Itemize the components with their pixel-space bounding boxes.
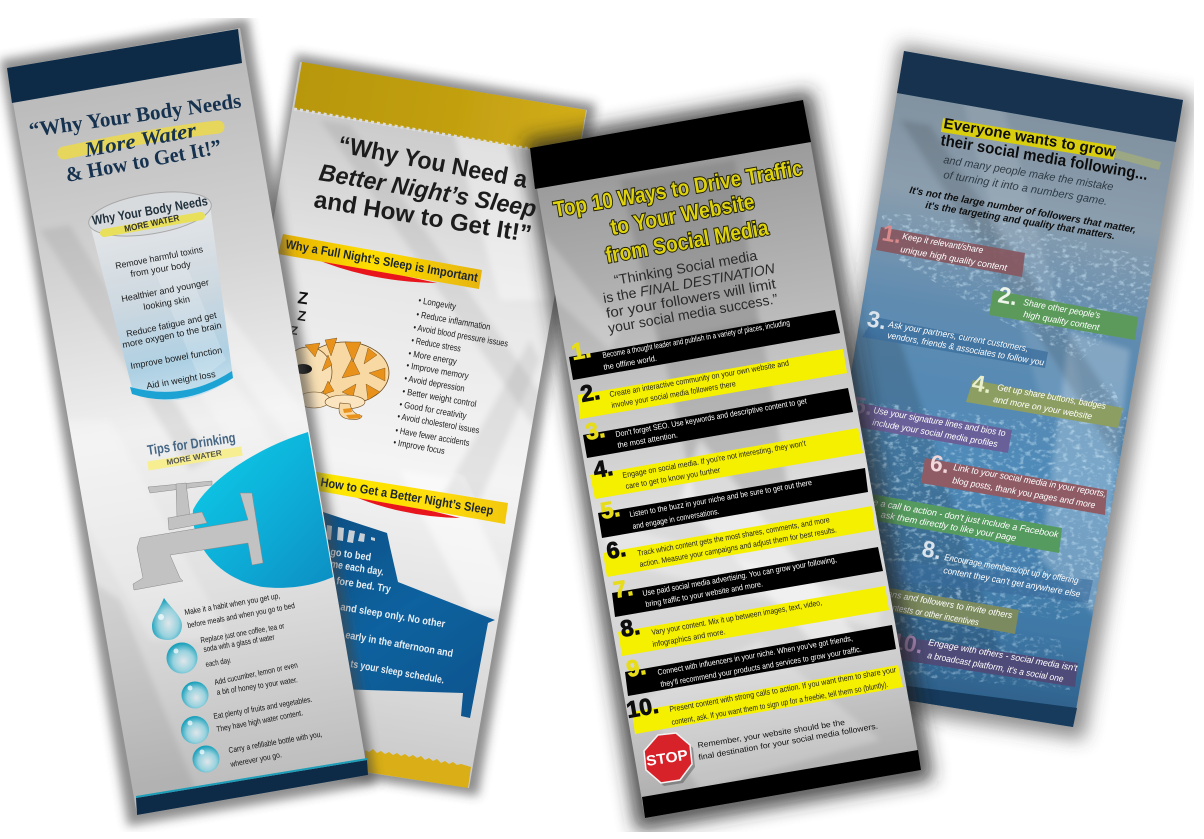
- step 6: action. Measure your campaigns and adjust them for best results.: [639, 525, 837, 569]
- panel: better night's sleep: [268, 48, 602, 802]
- step 2: 2.: [578, 378, 602, 407]
- tip 6: [921, 449, 1107, 515]
- tip 8: 8.: [920, 535, 944, 564]
- step 8: infographics and more.: [652, 627, 726, 649]
- icon: glass of water with benefits: from your body: [130, 259, 192, 279]
- icon: faucet: [133, 481, 263, 590]
- step 4: Engage on social media. If you're not interesting, they won't: [622, 439, 807, 480]
- step 7: bring traffic to your website and more.: [645, 579, 764, 609]
- section heading: how to sleep better: How to Get a Better Night’s Sleep: [320, 475, 495, 518]
- top band: [7, 29, 242, 103]
- tip 8: [885, 535, 1093, 603]
- step 6: 6.: [604, 535, 628, 564]
- tip 6: blog posts, thank you pages and more: [952, 475, 1096, 510]
- drinking tips text: Make it a habit when you get up,: [184, 591, 281, 617]
- title: [312, 131, 538, 248]
- drinking tips text: each day.: [205, 656, 232, 669]
- step 10: 10.: [624, 692, 660, 723]
- tip 4: [966, 369, 1123, 428]
- bottom band: [800, 672, 1077, 727]
- tip 7: Use a call to action - don't just include a Facebook: [862, 495, 1060, 540]
- panel: grow your social media following: [800, 44, 1194, 740]
- step 2: Create an interactive community on your own website and: [609, 359, 790, 399]
- step 10: content, ask. If you want them to sign up for a freebie, tell them so (bluntly).: [671, 680, 889, 727]
- title: [552, 155, 804, 268]
- heading: tips for drinking: MORE WATER: [166, 448, 223, 467]
- icon: sleeping cat: [284, 288, 389, 420]
- icon: stop sign: [644, 733, 695, 786]
- step 3: the most attention.: [617, 431, 678, 450]
- step 8: Vary your content. Mix it up between images, text, video,: [651, 598, 823, 637]
- step 5: [598, 468, 868, 538]
- benefits list: • Reduce inflammation: [416, 309, 491, 332]
- quote: [602, 247, 779, 336]
- step 7: Use paid social media advertising. You can grow your following,: [642, 555, 837, 598]
- drinking tips text: before meals and when you go to bed: [187, 601, 296, 630]
- icon: blue bed with tips: go to bed: [330, 546, 372, 564]
- title: & How to Get It!”: [64, 135, 223, 187]
- step 6: [603, 506, 875, 577]
- benefits list: • Better weight control: [402, 386, 477, 409]
- step 1: Become a thought leader and publish in a variety of places, including: [602, 318, 790, 360]
- blue water splash: [193, 432, 333, 588]
- closing note: Remember, your website should be the: [697, 718, 846, 750]
- icon: stop sign: STOP: [645, 748, 689, 770]
- step 4: [590, 428, 863, 499]
- tip 1: unique high quality content: [900, 244, 1008, 273]
- tip 9: Ask fans and followers to invite others: [867, 585, 1014, 620]
- icon: sleeping cat: Z: [296, 288, 309, 308]
- tip 3: [862, 305, 1048, 368]
- tip 8: content they can't get anywhere else: [943, 565, 1081, 599]
- title: “Why You Need a: [336, 131, 530, 194]
- tip 4: Get up share buttons, badges: [997, 382, 1107, 411]
- icon: blue bed with tips: [300, 505, 495, 718]
- step 8: 8.: [618, 613, 642, 642]
- panel: top 10 ways to drive traffic: [524, 90, 934, 832]
- closing note: final destination for your social media followers.: [698, 722, 879, 762]
- step 9: 9.: [624, 653, 648, 682]
- tip 5: Use your signature lines and bios to: [873, 405, 1006, 438]
- step 9: they'll recommend your products and services to grow your traffic.: [660, 645, 862, 689]
- step 5: Listen to the buzz in your niche and be sure to get out there: [629, 478, 813, 519]
- top band: [530, 100, 811, 189]
- bottom yellow band: [365, 749, 471, 788]
- step 3: [583, 388, 853, 458]
- quote: is the FINAL DESTINATION: [602, 260, 777, 306]
- step 3: Don't forget SEO. Use keywords and descriptive content to get: [615, 396, 808, 439]
- icon: glass of water with benefits: Healthier and younger: [120, 277, 210, 304]
- step 10: Present content with strong calls to action. If you want them to share your: [669, 665, 897, 714]
- tip 5: 5.: [851, 391, 875, 420]
- step 7: 7.: [611, 574, 635, 603]
- benefits list: • Improve memory: [406, 360, 470, 381]
- tip 2: 2.: [996, 281, 1020, 310]
- tip 10: [888, 627, 1079, 687]
- tip 7: link, ask them directly to like your page: [862, 506, 1017, 543]
- top yellow band: [294, 62, 586, 157]
- icon: blue bed with tips: fore bed. Try: [336, 575, 392, 596]
- tip 1: Keep it relevant/share: [902, 231, 984, 255]
- step 5: and engage in conversations.: [632, 507, 720, 531]
- step 1: [569, 310, 840, 380]
- title: from Social Media: [604, 215, 771, 268]
- tip 6: 6.: [928, 449, 952, 478]
- title: Top 10 Ways to Drive Traffic: [552, 155, 804, 222]
- drinking tips text: [184, 591, 323, 769]
- icon: glass of water with benefits: Remove harmful toxins: [114, 244, 204, 271]
- heading: it's the targeting and quality that matters.: [925, 200, 1116, 242]
- drinking tips text: Carry a refillable bottle with you,: [228, 730, 323, 755]
- tip 9: with contests or other incentives: [868, 598, 980, 627]
- step 1: the offline world.: [603, 354, 658, 372]
- step 9: Connect with influencers in your niche. When you've got friends,: [657, 634, 853, 677]
- icon: glass of water with benefits: looking skin: [143, 294, 191, 312]
- heading: of turning it into a numbers game.: [943, 169, 1108, 208]
- heading: and many people make the mistake: [943, 154, 1114, 193]
- drinking tips text: Add cucumber, lemon or even: [214, 660, 299, 687]
- step 3: 3.: [583, 416, 607, 445]
- tip 10: Engage with others - social media isn't: [928, 637, 1079, 673]
- quote: “Thinking Social media: [613, 247, 759, 288]
- heading: tips for drinking: Tips for Drinking: [146, 429, 236, 458]
- drinking tips text: soda with a glass of water: [203, 633, 276, 654]
- tip 4: and more on your website: [993, 394, 1093, 421]
- title: and How to Get It!”: [312, 186, 534, 248]
- drinking tips text: Eat plenty of fruits and vegetables.: [213, 695, 313, 721]
- icon: sleeping cat: Z: [290, 323, 299, 338]
- benefits list: • Reduce stress: [411, 335, 462, 354]
- bottom band: [642, 750, 921, 818]
- section heading: why sleep matters: Why a Full Night’s Sleep is Important: [284, 237, 480, 285]
- benefits list: • Good for creativity: [399, 399, 468, 421]
- tip 3: 3.: [865, 305, 889, 334]
- title: to Your Website: [608, 189, 756, 240]
- bottom band: [136, 758, 368, 815]
- step 9: [624, 625, 896, 696]
- title: More Water: [81, 118, 199, 162]
- icon: blue bed with tips: early in the afternoon and: [344, 629, 454, 660]
- tip 5: [851, 391, 1012, 453]
- tip 4: 4.: [970, 369, 994, 398]
- tip 10: a broadcast platform, it's a social one: [927, 650, 1064, 684]
- tip 9: [860, 583, 1019, 634]
- icon: blue bed with tips: ts your sleep schedule.: [349, 658, 445, 686]
- heading: their social media following...: [939, 132, 1149, 184]
- step 2: involve your social media followers there: [611, 379, 737, 410]
- step 6: Track which content gets the most shares, comments, and more: [637, 515, 831, 558]
- icon: glass of water with benefits: Improve bowel function: [130, 345, 223, 371]
- benefits list: • Avoid blood pressure issues: [413, 322, 509, 349]
- benefits list: • Improve focus: [393, 437, 446, 456]
- heading: tips for drinking: [146, 429, 242, 467]
- icon: glass of water with benefits: MORE WATER: [123, 212, 181, 234]
- benefits list: [393, 295, 509, 456]
- icon: water drops: [152, 598, 220, 772]
- icon: glass of water with benefits: Why Your Body Needs: [91, 193, 209, 228]
- step 8: [618, 586, 889, 656]
- benefits list: • Avoid depression: [404, 373, 465, 394]
- drinking tips text: Replace just one coffee, tea or: [200, 621, 285, 645]
- step 10: [624, 665, 903, 734]
- heading: It's not the large number of followers that matter,: [908, 185, 1137, 236]
- tip 1: 1.: [880, 219, 904, 248]
- benefits list: • Avoid cholesterol issues: [397, 411, 481, 435]
- tip 2: high quality content: [1023, 309, 1101, 332]
- icon: blue bed with tips: and sleep only. No other: [340, 601, 446, 630]
- title: “Why Your Body Needs: [27, 88, 243, 142]
- step 5: 5.: [598, 495, 622, 524]
- tip 2: [989, 281, 1138, 340]
- benefits list: • More energy: [408, 348, 458, 367]
- quote: your social media success.”: [607, 290, 779, 336]
- benefits list: • Longevity: [418, 295, 457, 312]
- top band: [897, 51, 1183, 142]
- tip 3: Ask your partners, current customers,: [887, 319, 1029, 354]
- step 7: [611, 547, 883, 617]
- drinking tips text: a bit of honey to your water.: [216, 675, 298, 697]
- tip 3: vendors, friends & associates to follow you: [887, 330, 1045, 368]
- step 4: 4.: [591, 454, 615, 483]
- tip 1: [876, 219, 1025, 277]
- icon: glass of water with benefits: more oxygen to the brain: [121, 320, 222, 350]
- title: Better Night’s Sleep: [317, 159, 538, 223]
- icon: glass of water with benefits: [86, 185, 233, 400]
- tip 2: Share other people's: [1023, 297, 1102, 321]
- title: [27, 88, 243, 187]
- tip 6: Link to your social media in your reports,: [953, 462, 1107, 499]
- tip 8: Encourage members/opt up by offering: [944, 552, 1079, 586]
- icon: blue bed with tips: me each day.: [330, 558, 385, 578]
- panel: why your body needs more water: [0, 18, 376, 826]
- benefits list: • Have fewer accidents: [395, 425, 471, 448]
- icon: sleeping cat: Z: [297, 307, 308, 324]
- heading: Everyone wants to grow: [942, 115, 1117, 161]
- drinking tips text: They have high water content.: [216, 708, 304, 734]
- step 4: care to get to know you further: [625, 465, 721, 491]
- step 1: 1.: [569, 336, 593, 365]
- heading: [908, 115, 1160, 242]
- drinking tips text: wherever you go.: [229, 750, 282, 769]
- tip 10: 10.: [889, 627, 925, 658]
- step 2: [578, 349, 847, 419]
- tip 5: include your social media profiles: [872, 417, 999, 449]
- icon: glass of water with benefits: Aid in weight loss: [146, 369, 217, 391]
- icon: glass of water with benefits: Reduce fatigue and get: [125, 310, 218, 339]
- quote: for your followers will limit: [605, 275, 777, 321]
